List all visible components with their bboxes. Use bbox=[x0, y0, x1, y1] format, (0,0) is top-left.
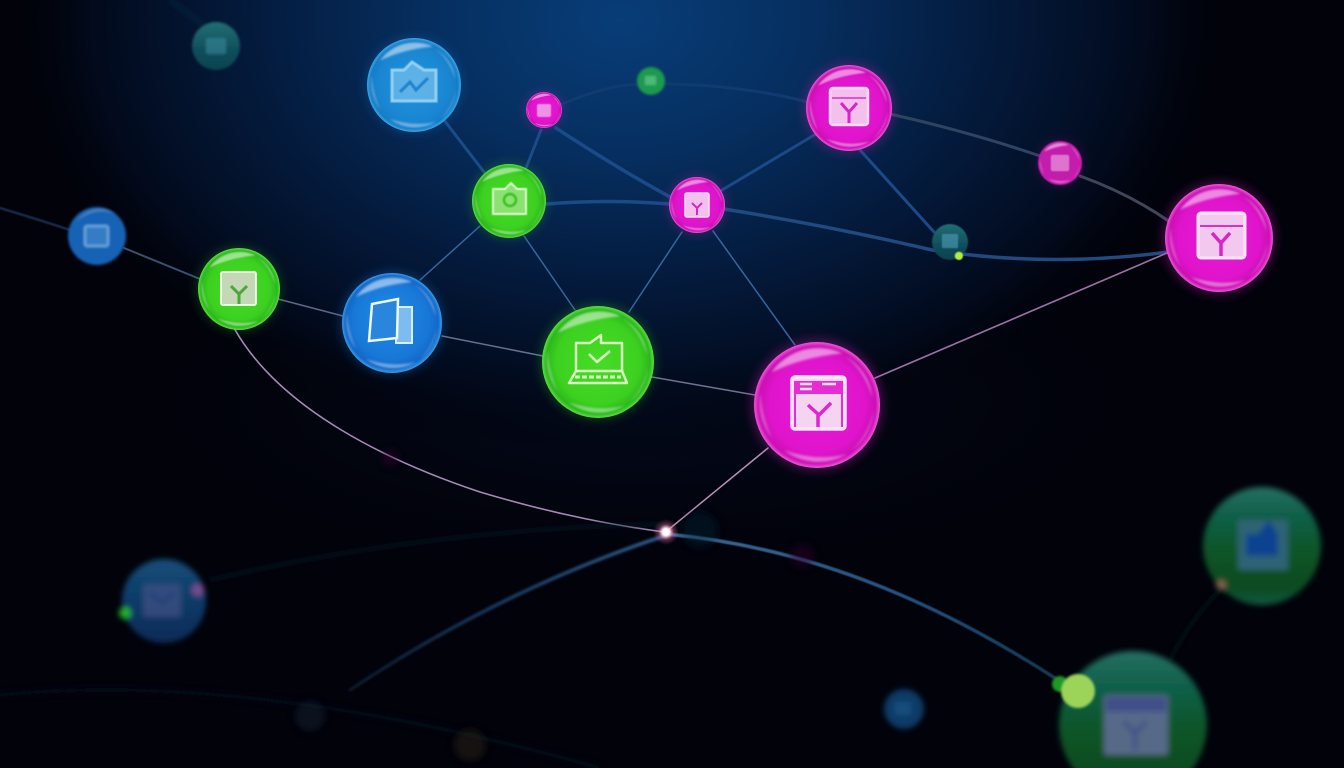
node: magenta far right bbox=[1162, 181, 1276, 295]
icon: documents bbox=[369, 299, 412, 343]
node: large green centre bbox=[540, 304, 656, 420]
icon: window with Y bbox=[1198, 213, 1245, 258]
node: magenta top right bbox=[803, 62, 895, 154]
node: small magenta right bbox=[1037, 140, 1083, 186]
node: magenta centre bbox=[667, 175, 727, 235]
connection lines: blue network bbox=[0, 84, 1170, 345]
node: blue left bbox=[68, 207, 126, 265]
icon: window with Y bbox=[792, 377, 845, 429]
node: teal small bbox=[932, 224, 968, 260]
bright junction spark bbox=[653, 519, 679, 545]
icon: laptop refresh bbox=[493, 183, 526, 214]
node: small green top bbox=[637, 67, 665, 95]
connection lines: pink network bbox=[234, 253, 1167, 532]
node: far blurred teal top-left bbox=[192, 22, 240, 70]
node: green upper centre bbox=[470, 162, 548, 240]
node: large magenta bbox=[751, 339, 883, 471]
glowing lime dot bbox=[1052, 674, 1095, 708]
icon: window with Y bbox=[221, 272, 256, 305]
node: dim green right bbox=[1203, 487, 1321, 605]
icon: window with Y bbox=[685, 193, 709, 217]
node: green left bbox=[196, 246, 282, 332]
icon: laptop with check bbox=[569, 335, 627, 383]
icon: window with Y bbox=[830, 88, 868, 125]
node: small magenta top bbox=[524, 90, 564, 130]
node: dim green bottom right bbox=[1059, 651, 1207, 768]
node: blue centre bbox=[340, 271, 444, 375]
faint blurred particles bbox=[295, 450, 814, 761]
node: small dim blue bottom bbox=[884, 689, 924, 729]
icon: image card bbox=[392, 62, 436, 101]
node: large blue top bbox=[365, 36, 463, 134]
node: dim blue lower left bbox=[119, 559, 206, 643]
